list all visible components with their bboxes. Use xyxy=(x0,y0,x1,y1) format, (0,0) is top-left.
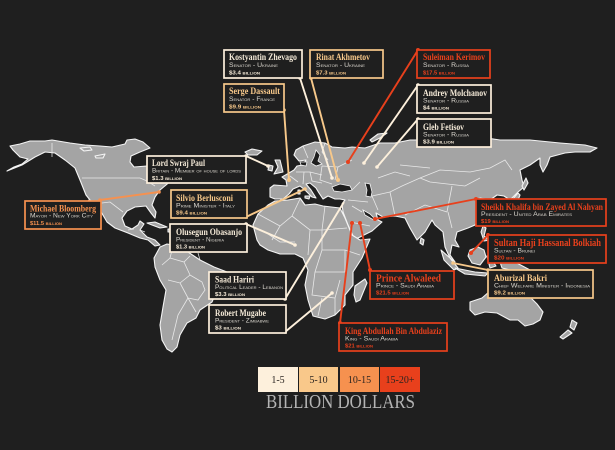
line: Khalifa xyxy=(375,199,476,219)
callout: Aburizal Bakri: Aburizal Bakri xyxy=(494,274,547,284)
callout: Prince Alwaleed: Prince Alwaleed xyxy=(376,272,441,284)
callout: Andrey Molchanov: Senator - Russia xyxy=(423,98,469,104)
callout: Lord Swraj Paul: $1.3 billion xyxy=(152,176,182,182)
line: Kerimov xyxy=(348,50,418,162)
callout: Sultan Haji Hassanal Bolkiah xyxy=(488,235,606,263)
line: Obasanjo xyxy=(246,224,295,245)
callout: Suleiman Kerimov: Suleiman Kerimov xyxy=(423,53,485,63)
legend swatch: 15-20+ xyxy=(380,367,420,392)
callout: Michael Bloomberg: Mayor - New York City xyxy=(30,212,93,220)
callout: Robert Mugabe: $3 billion xyxy=(215,326,241,332)
callout: King Abdullah Bin Abdulaziz: King Abdullah Bin Abdulaziz xyxy=(345,327,443,337)
connector dots xyxy=(98,48,490,334)
line: Bolkiah xyxy=(471,235,488,253)
connector lines xyxy=(100,50,488,332)
callout: Saad Hariri xyxy=(209,272,286,299)
callout: Sultan Haji Hassanal Bolkiah: $20 billion xyxy=(494,256,524,262)
callout: Kostyantin Zhevago xyxy=(224,50,302,78)
line: Bloomberg xyxy=(100,192,159,200)
callout: Michael Bloomberg xyxy=(25,201,101,229)
world map xyxy=(7,133,597,352)
callout: Aburizal Bakri: $9.2 billion xyxy=(494,290,525,296)
line: Zhevago xyxy=(300,78,332,178)
map: Australia xyxy=(470,283,543,326)
callout: King Abdullah Bin Abdulaziz: King - Saudi Arabia xyxy=(345,336,398,342)
callout: Serge Dassault: $9.9 billion xyxy=(229,104,261,110)
callout: Sheikh Khalifa bin Zayed Al Nahyan xyxy=(476,199,606,226)
legend swatch: 10-15 xyxy=(340,367,379,392)
map: islands xyxy=(245,133,577,339)
callout: Silvio Berlusconi xyxy=(171,190,247,218)
callout: Serge Dassault: Serge Dassault xyxy=(229,87,281,97)
line: Mugabe xyxy=(285,293,332,332)
legend swatch: 5-10: 5-10 xyxy=(309,375,328,386)
legend swatch: 15-20+: 15-20+ xyxy=(386,375,415,386)
callout: Gleb Fetisov: Senator - Russia xyxy=(423,132,469,138)
callout: Olusegun Obasanjo: Olusegun Obasanjo xyxy=(176,228,242,238)
callout: Robert Mugabe xyxy=(209,305,286,333)
legend xyxy=(258,367,420,413)
line: Fetisov xyxy=(377,119,418,167)
callout: Lord Swraj Paul xyxy=(147,156,246,183)
callout: Saad Hariri: Political Leader - Lebanon xyxy=(215,284,283,291)
callout: Suleiman Kerimov: Senator - Russia xyxy=(423,62,469,69)
callout: Prince Alwaleed xyxy=(370,271,454,299)
callout: Kostyantin Zhevago: Senator - Ukraine xyxy=(229,62,278,69)
legend swatch: 10-15: 10-15 xyxy=(348,375,371,386)
map: Africa xyxy=(253,198,370,319)
callout: Lord Swraj Paul: Britain - Member of house of lords xyxy=(152,168,241,174)
callout: Olusegun Obasanjo xyxy=(170,224,247,252)
callout: Gleb Fetisov: Gleb Fetisov xyxy=(423,123,464,133)
callout: Sheikh Khalifa bin Zayed Al Nahyan: $19 billion xyxy=(481,219,509,225)
line: Berlusconi xyxy=(246,189,305,217)
callout: Serge Dassault xyxy=(224,84,284,112)
line: Akhmetov xyxy=(311,78,338,180)
callout: King Abdullah Bin Abdulaziz xyxy=(339,323,447,351)
callout: Andrey Molchanov: Andrey Molchanov xyxy=(423,89,487,99)
legend swatch: 5-10 xyxy=(299,367,338,392)
line: Alwaleed xyxy=(360,223,370,270)
callout: Michael Bloomberg: Michael Bloomberg xyxy=(30,204,96,214)
callout: Gleb Fetisov xyxy=(417,119,491,147)
callout: Saad Hariri: Saad Hariri xyxy=(215,276,254,286)
callout: Sheikh Khalifa bin Zayed Al Nahyan: President - United Arab Emirates xyxy=(481,211,572,218)
callout: Sultan Haji Hassanal Bolkiah: Sultan - Brunei xyxy=(494,248,535,254)
map: Eurasia xyxy=(270,137,597,262)
callout: Kostyantin Zhevago: Kostyantin Zhevago xyxy=(229,53,297,63)
line: Hariri xyxy=(285,202,344,299)
callout: Prince Alwaleed: $21.5 billion xyxy=(376,290,409,296)
callout: Saad Hariri: $3.3 billion xyxy=(215,292,245,298)
callout: Rinat Akhmetov xyxy=(310,50,383,78)
callout: Gleb Fetisov: $3.9 billion xyxy=(423,140,454,146)
callout: Silvio Berlusconi: Prime Minister - Italy xyxy=(176,202,235,210)
line: Molchanov xyxy=(364,85,418,163)
callout: Suleiman Kerimov: $17.5 billion xyxy=(423,70,455,76)
callout: Andrey Molchanov xyxy=(417,85,491,113)
callout: Olusegun Obasanjo: President - Nigeria xyxy=(176,236,224,244)
callout: Aburizal Bakri xyxy=(488,270,593,298)
callout: Rinat Akhmetov: Rinat Akhmetov xyxy=(316,53,370,63)
line: Bakri xyxy=(453,263,488,270)
callout: Prince Alwaleed: Prince - Saudi Arabia xyxy=(376,282,434,290)
callout: Andrey Molchanov: $4 billion xyxy=(423,106,449,112)
callout: Robert Mugabe: Robert Mugabe xyxy=(215,309,266,319)
legend swatch: 1-5 xyxy=(258,367,298,392)
line: Dassault xyxy=(284,110,289,180)
callout: Rinat Akhmetov: $7.3 billion xyxy=(316,70,346,76)
legend title: BILLION DOLLARS xyxy=(266,392,415,413)
callout: Kostyantin Zhevago: $3.4 billion xyxy=(229,70,260,76)
line: Paul xyxy=(246,156,268,166)
callout: Serge Dassault: Senator - France xyxy=(229,96,275,103)
line: Abdullah xyxy=(340,223,352,323)
callout: Rinat Akhmetov: Senator - Ukraine xyxy=(316,62,365,69)
map: South America xyxy=(154,244,227,352)
callout: Silvio Berlusconi: Silvio Berlusconi xyxy=(176,194,233,204)
callout: King Abdullah Bin Abdulaziz: $21 billion xyxy=(345,344,373,350)
callout: Suleiman Kerimov xyxy=(417,50,490,78)
legend swatch: 1-5: 1-5 xyxy=(271,375,285,386)
callout: Michael Bloomberg: $11.5 billion xyxy=(30,221,62,227)
callout: Lord Swraj Paul: Lord Swraj Paul xyxy=(152,159,205,169)
map: North America xyxy=(7,139,175,246)
callout: Olusegun Obasanjo: $1.3 billion xyxy=(176,244,205,250)
callout: Robert Mugabe: President - Zimbabwe xyxy=(215,318,269,324)
callout: Aburizal Bakri: Chief Welfare Minister - Indonesia xyxy=(494,282,590,290)
callout: Silvio Berlusconi: $9.4 billion xyxy=(176,210,207,216)
